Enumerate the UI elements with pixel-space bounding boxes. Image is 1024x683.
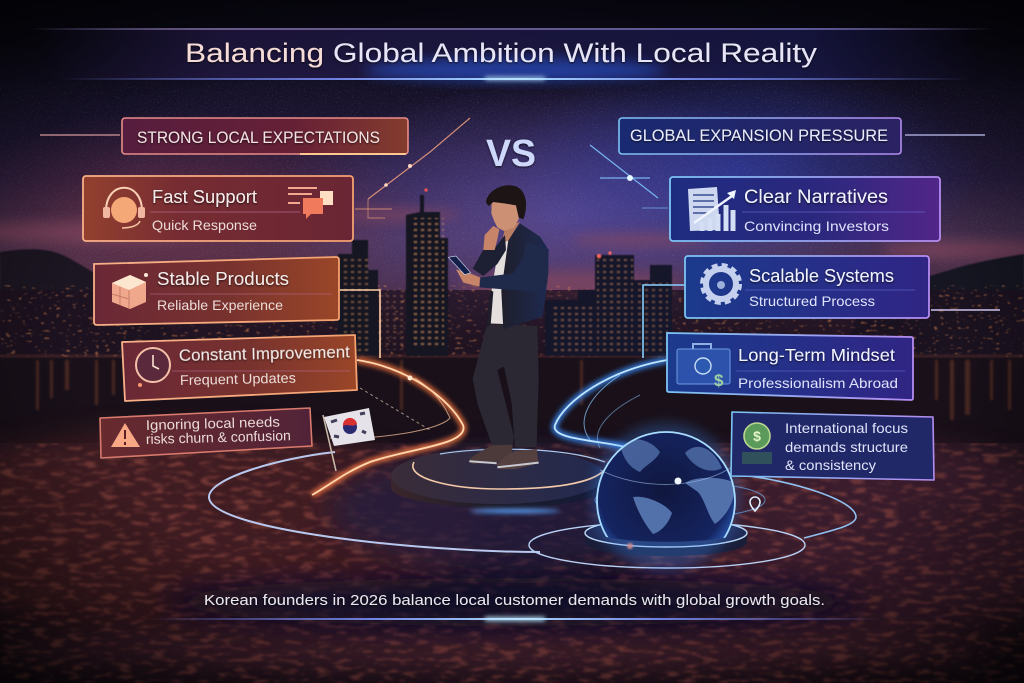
header: global expansion pressure: GLOBAL EXPANSION PRESSURE <box>630 126 888 145</box>
ground lights <box>0 430 480 630</box>
warning callout: Ignoring local needs <box>146 413 280 433</box>
icon: document and growth arrow <box>688 187 736 231</box>
card: fast support: Fast Support <box>152 187 257 207</box>
skyline <box>338 188 672 356</box>
icon: coin <box>742 423 772 464</box>
globe pedestal <box>585 519 747 556</box>
pins <box>674 478 682 484</box>
card: fast support <box>83 176 353 241</box>
card: scalable systems <box>685 256 929 318</box>
icon: gear <box>702 265 740 303</box>
card: clear narratives: Convincing Investors <box>744 218 889 234</box>
callout: international focus: International focus <box>785 420 908 436</box>
card: stable products: Reliable Experience <box>157 297 283 313</box>
glowing path: global <box>555 360 667 448</box>
icon: cube <box>112 273 148 309</box>
card: long-term mindset: Long-Term Mindset <box>738 345 895 365</box>
far arm <box>473 235 506 276</box>
title: Balancing Global Ambition With Local Reality <box>185 38 818 68</box>
card: scalable systems: Structured Process <box>749 293 875 309</box>
shoes <box>469 445 513 464</box>
connector: local side lines <box>40 118 470 358</box>
title band <box>30 28 994 82</box>
glowing path: local <box>312 360 464 495</box>
callout: international focus <box>731 412 934 480</box>
card: long-term mindset: Professionalism Abroad <box>738 375 898 391</box>
icon: korean flag <box>323 408 375 471</box>
warning callout: risks churn & confusion <box>146 427 291 447</box>
card: constant improvement: Constant Improvement <box>179 342 350 365</box>
warning callout <box>100 408 312 458</box>
header: global expansion pressure <box>619 118 901 154</box>
man's platform <box>391 448 606 513</box>
globe <box>592 423 760 571</box>
icon: chat bubbles <box>288 188 333 219</box>
neck <box>502 222 520 243</box>
continents <box>620 439 735 534</box>
phone hand <box>456 269 480 287</box>
card: stable products: Stable Products <box>157 269 289 289</box>
callout: international focus: demands structure <box>785 439 908 455</box>
near arm <box>479 242 548 292</box>
icon: briefcase: $ <box>714 371 724 390</box>
man with phone <box>448 185 549 469</box>
card: scalable systems: Scalable Systems <box>749 266 894 286</box>
card: clear narratives <box>670 177 940 241</box>
rings on the ground <box>209 452 856 568</box>
jacket body <box>501 223 549 329</box>
header: strong local expectations <box>122 118 408 154</box>
icon: clock <box>136 348 170 387</box>
icon: warning triangle <box>111 423 140 447</box>
face <box>491 198 520 231</box>
card: constant improvement <box>122 335 357 401</box>
header: strong local expectations: STRONG LOCAL EXPECTATIONS <box>137 128 380 147</box>
connector: global side lines <box>590 135 1000 358</box>
footer caption <box>150 592 880 621</box>
hand at chin <box>483 226 499 250</box>
icon: coin: $ <box>753 428 761 444</box>
card: constant improvement: Frequent Updates <box>180 370 296 388</box>
callout: international focus: & consistency <box>785 457 876 473</box>
pink clouds <box>0 209 1024 299</box>
water <box>0 358 1024 443</box>
distant hills <box>0 249 200 360</box>
card: fast support: Quick Response <box>152 217 257 233</box>
icon: headset <box>103 188 145 228</box>
card: stable products <box>94 257 339 325</box>
shirt <box>487 238 510 324</box>
hair <box>486 185 526 219</box>
icon: briefcase <box>677 344 730 390</box>
phone <box>448 256 471 275</box>
card: long-term mindset <box>667 333 913 400</box>
footer caption: Korean founders in 2026 balance local customer demands with global growth goals. <box>204 592 825 609</box>
vs label: VS <box>486 133 536 175</box>
card: clear narratives: Clear Narratives <box>744 187 888 208</box>
trousers <box>473 324 539 447</box>
